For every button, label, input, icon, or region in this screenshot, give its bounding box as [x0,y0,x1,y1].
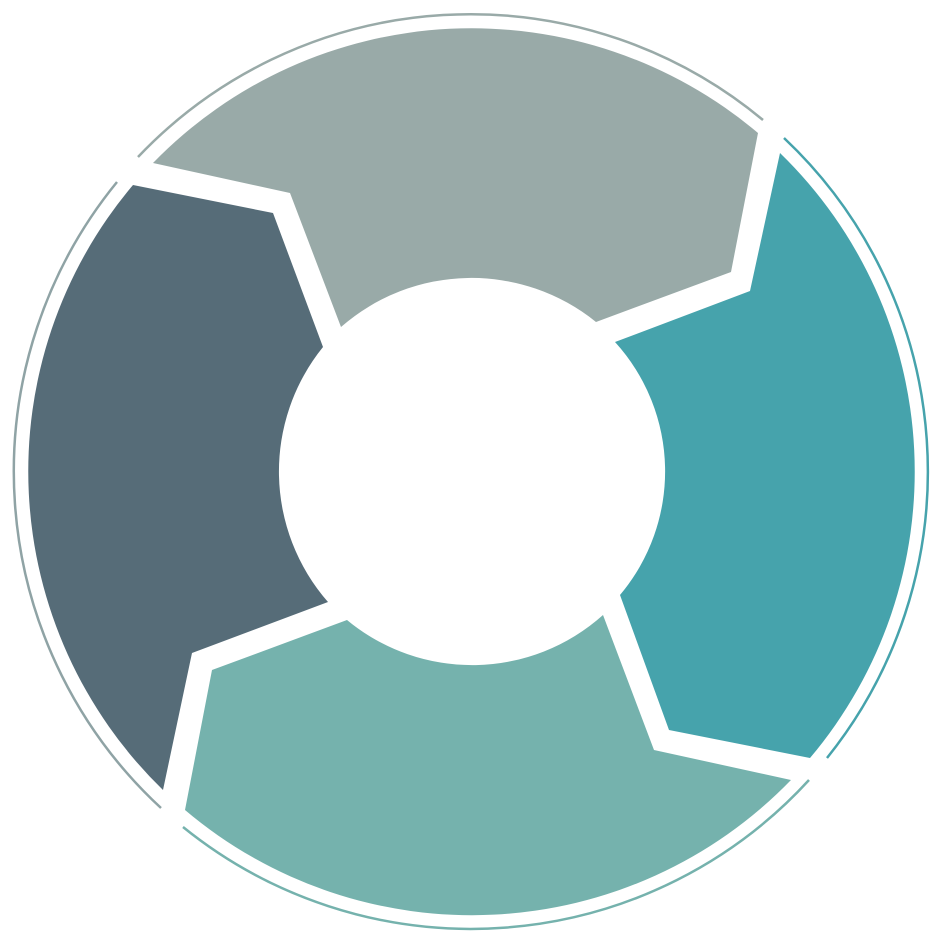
segment: teal right arrow [615,153,915,758]
ring arc: bottom [183,780,809,929]
ring arc: top [138,14,763,157]
ring arc: right [784,138,928,758]
segment: light teal bottom arrow [185,615,791,915]
segment: dark slate left arrow [28,185,328,790]
ring arc: left [14,182,161,808]
segment: gray top arrow [153,28,758,327]
